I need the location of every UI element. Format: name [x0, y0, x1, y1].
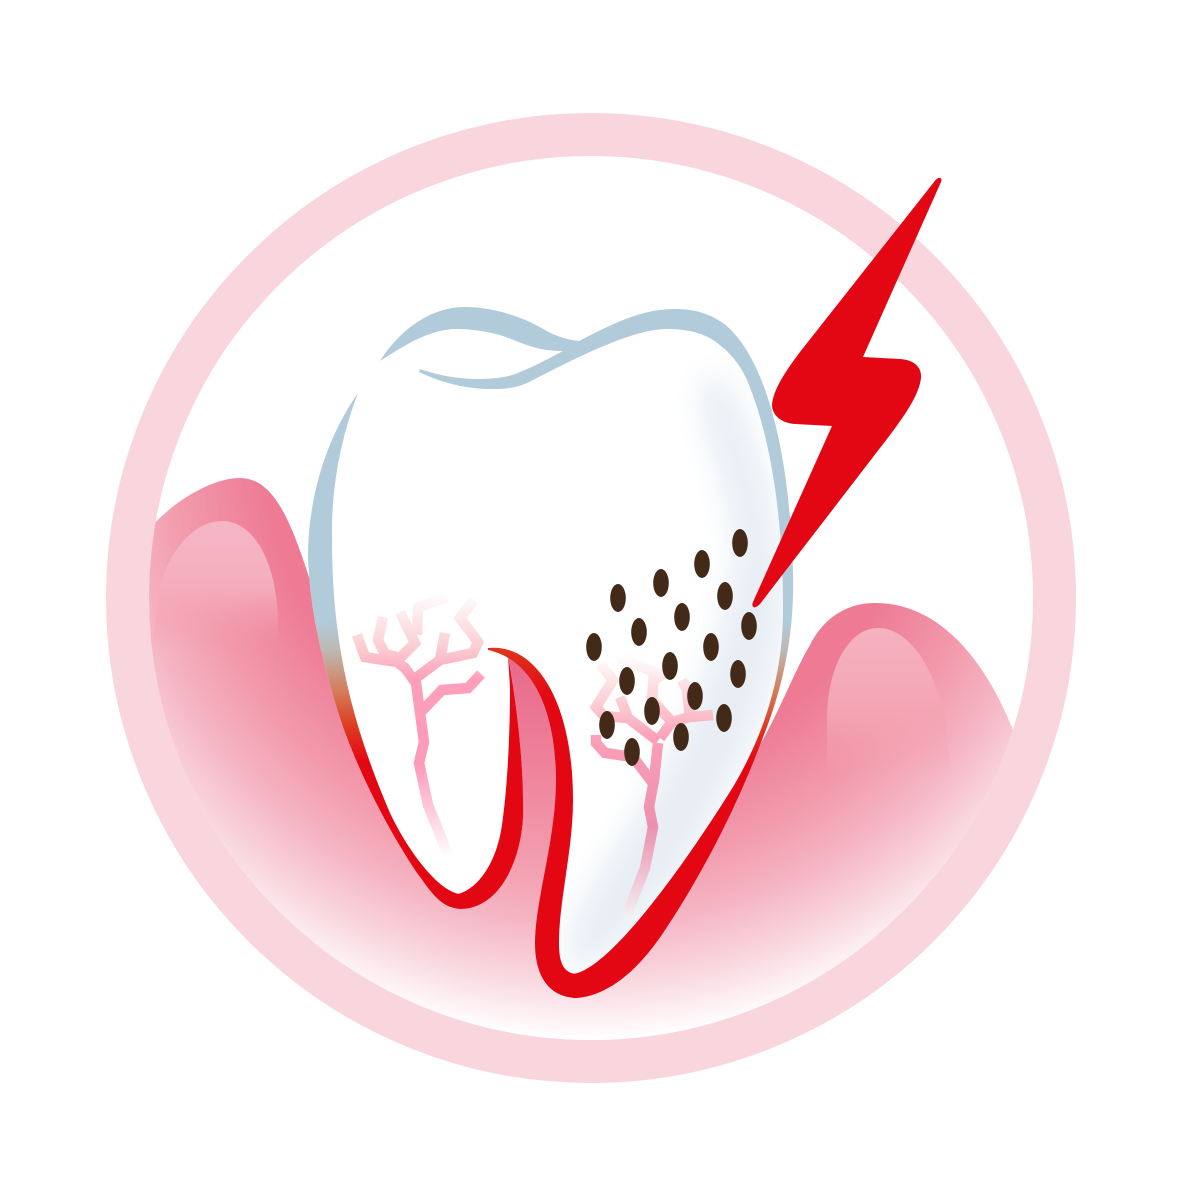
illustration: inflamed tooth [106, 113, 1076, 1083]
red gum line: left root inner side [458, 657, 523, 909]
crack: right root [596, 658, 713, 917]
plaque dots [586, 529, 757, 766]
icon: lightning bolt [752, 178, 941, 607]
tooth outline: left root [308, 393, 462, 909]
left gum highlight [164, 521, 278, 630]
tooth body [308, 307, 793, 998]
ring: outer pink circle [128, 134, 1054, 1062]
gum base shape [149, 478, 1013, 1040]
red gum line: right root crescent [488, 648, 578, 998]
tooth shading [565, 370, 785, 965]
gum tissue [149, 478, 1013, 1040]
crack: left root [357, 597, 481, 855]
tooth outline: crown and right side [380, 307, 793, 998]
right gum highlight [827, 628, 938, 750]
blue shade on right side of tooth [565, 370, 785, 965]
gum wedge between roots [508, 652, 564, 890]
